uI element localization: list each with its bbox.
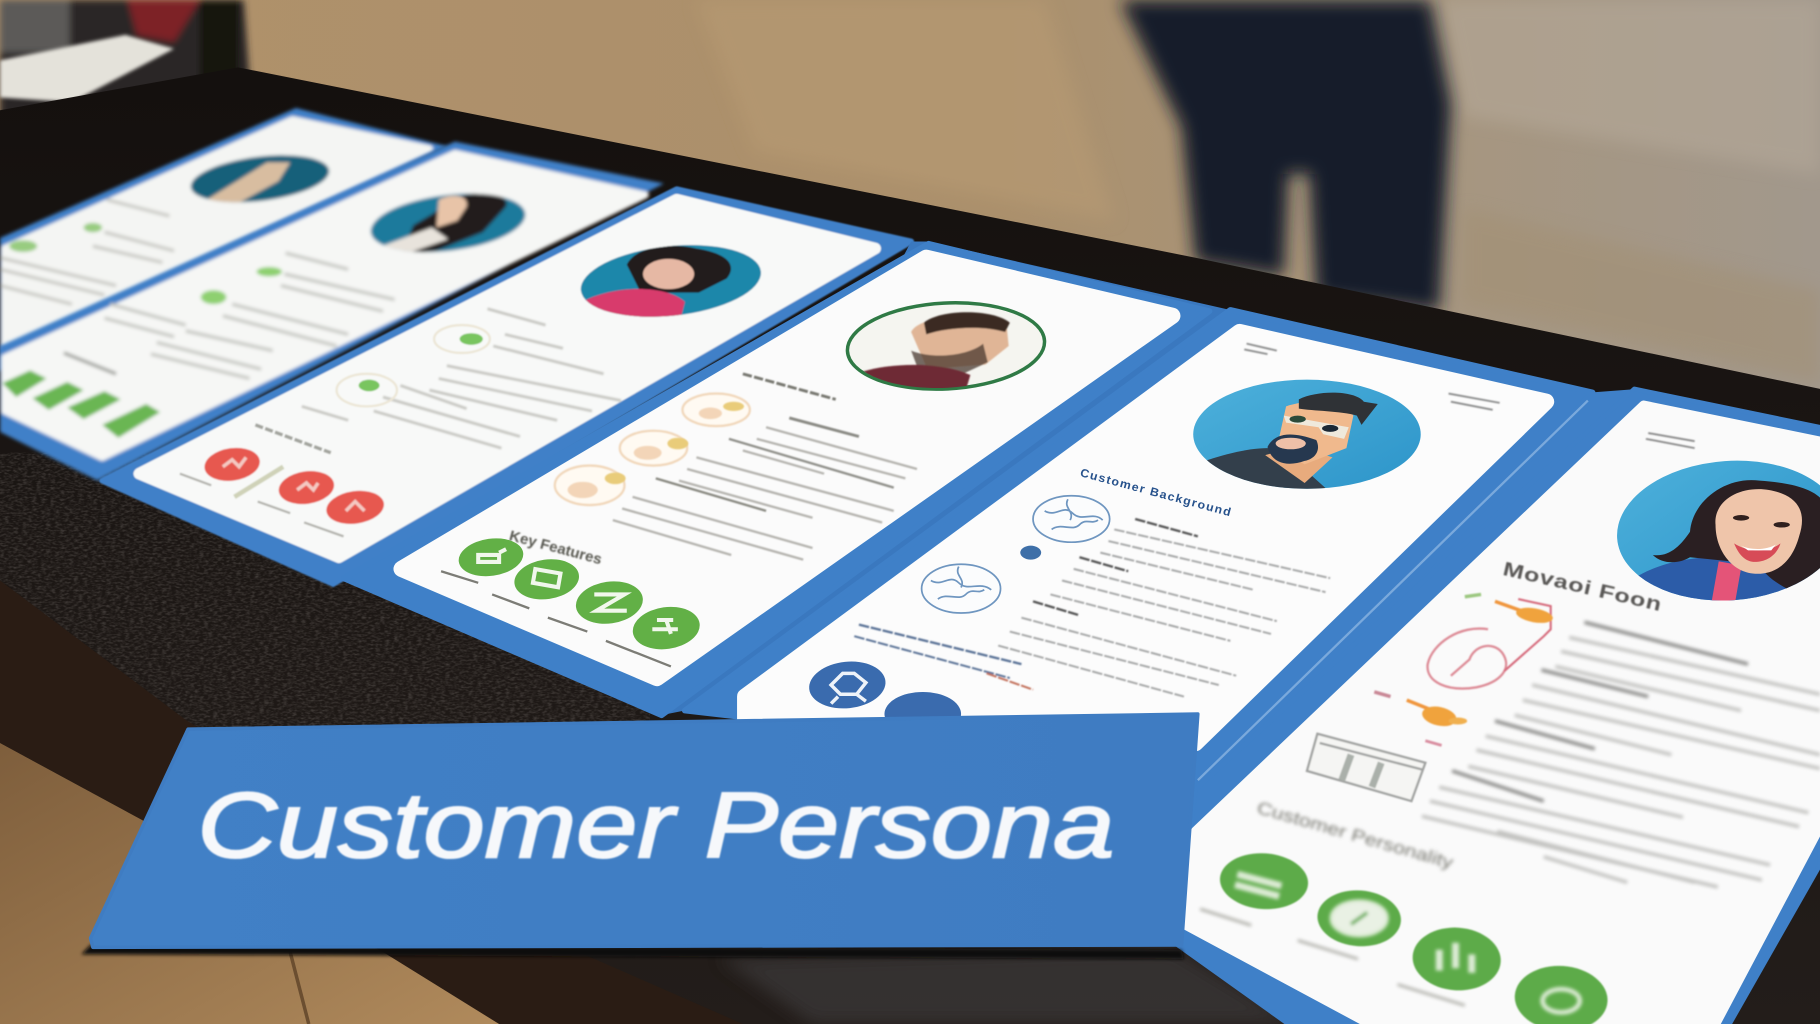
- heading: folder 2: [64, 353, 116, 374]
- heading: folder 5: Customer Background: [1079, 466, 1233, 519]
- persona name: Movaoi Foon: [1501, 558, 1664, 616]
- wood cabinet: [0, 743, 499, 1024]
- floor highlights: [696, 0, 1820, 383]
- icon glyphs: folder 3: [223, 457, 364, 511]
- heading: folder 3: [255, 425, 331, 453]
- avatar: folder 3: [580, 244, 762, 318]
- person's legs: [1120, 0, 1451, 311]
- floor background: [0, 0, 1820, 464]
- blue band between folders 5 and 6: [1196, 389, 1639, 806]
- table side band: [0, 580, 743, 1024]
- paper on table far left: [0, 35, 174, 102]
- icons: folder 1: [9, 223, 102, 252]
- table reflection: [720, 946, 1300, 1024]
- text lines: folder 1: [0, 200, 174, 304]
- icons: folder 3 red circles: [202, 444, 386, 527]
- panel: folder 2: [0, 142, 664, 481]
- icons: folder 6 green circles: [1218, 850, 1610, 1024]
- captions: folder 3: [180, 474, 344, 536]
- avatar: folder 1: [188, 152, 332, 204]
- sign title text: Customer Persona: [197, 773, 1114, 877]
- small green marks: folder 3: [359, 333, 483, 391]
- icon glyph: folder 5: [831, 673, 866, 704]
- panel: folder 6: [1175, 389, 1820, 1024]
- icon glyphs: folder 6: [1235, 874, 1580, 1012]
- browser box: folder 6: [1307, 734, 1425, 801]
- text lines: folder 6: [1422, 622, 1820, 887]
- pen: folder 3: [234, 467, 283, 497]
- brain icon: folder 5: [1033, 496, 1110, 542]
- heading: folder 4: Key Features: [507, 527, 604, 568]
- heading: folder 6 lower: Customer Personality: [1255, 797, 1456, 873]
- text lines: folder 4: [613, 374, 917, 560]
- dark area top left: [0, 0, 250, 128]
- crease: folder 5: [1198, 401, 1588, 780]
- small label: folder 6: [1646, 433, 1695, 448]
- drop mark: folder 5: [1020, 546, 1041, 560]
- text lines: folder 3: [302, 309, 621, 448]
- brain icon: folder 5 lower: [922, 564, 1001, 613]
- sign shadow: [81, 945, 1184, 959]
- text lines: folder 5: [854, 519, 1330, 697]
- icon accents: folder 4: [568, 402, 744, 498]
- avatar: folder 2: [368, 191, 528, 255]
- sign: Customer Persona: [91, 714, 1198, 947]
- small label: folder 5: [1244, 344, 1500, 410]
- text lines: folder 2: [104, 253, 395, 378]
- table top grain: [0, 453, 650, 929]
- icon glyphs: folder 4: [478, 549, 678, 634]
- panel: folder 4: [344, 244, 1209, 715]
- icon outlines: folder 3: [337, 325, 490, 406]
- small green marks: folder 2: [201, 267, 282, 304]
- diagram: folder 6: [1374, 594, 1554, 745]
- persona icons: folder 4: [555, 394, 750, 505]
- panel: folder 3: [102, 189, 911, 584]
- wood seam: [290, 952, 309, 1024]
- icons: folder 5 blue circles: [807, 658, 888, 712]
- captions: folder 6: [1200, 909, 1465, 1005]
- second blue circle: folder 5: [884, 692, 961, 736]
- seam filler between folders 4 and 5: [662, 241, 1230, 715]
- avatar: folder 6: [1617, 460, 1820, 600]
- icons: folder 2 green squares: [2, 370, 160, 438]
- panel: folder 5: [685, 310, 1592, 801]
- captions: folder 4: [441, 571, 671, 666]
- avatar: folder 4: [846, 301, 1046, 391]
- avatar: folder 5: [1193, 380, 1421, 489]
- icons: folder 4 green circles: [456, 534, 702, 653]
- panel: folder 1: [0, 108, 447, 372]
